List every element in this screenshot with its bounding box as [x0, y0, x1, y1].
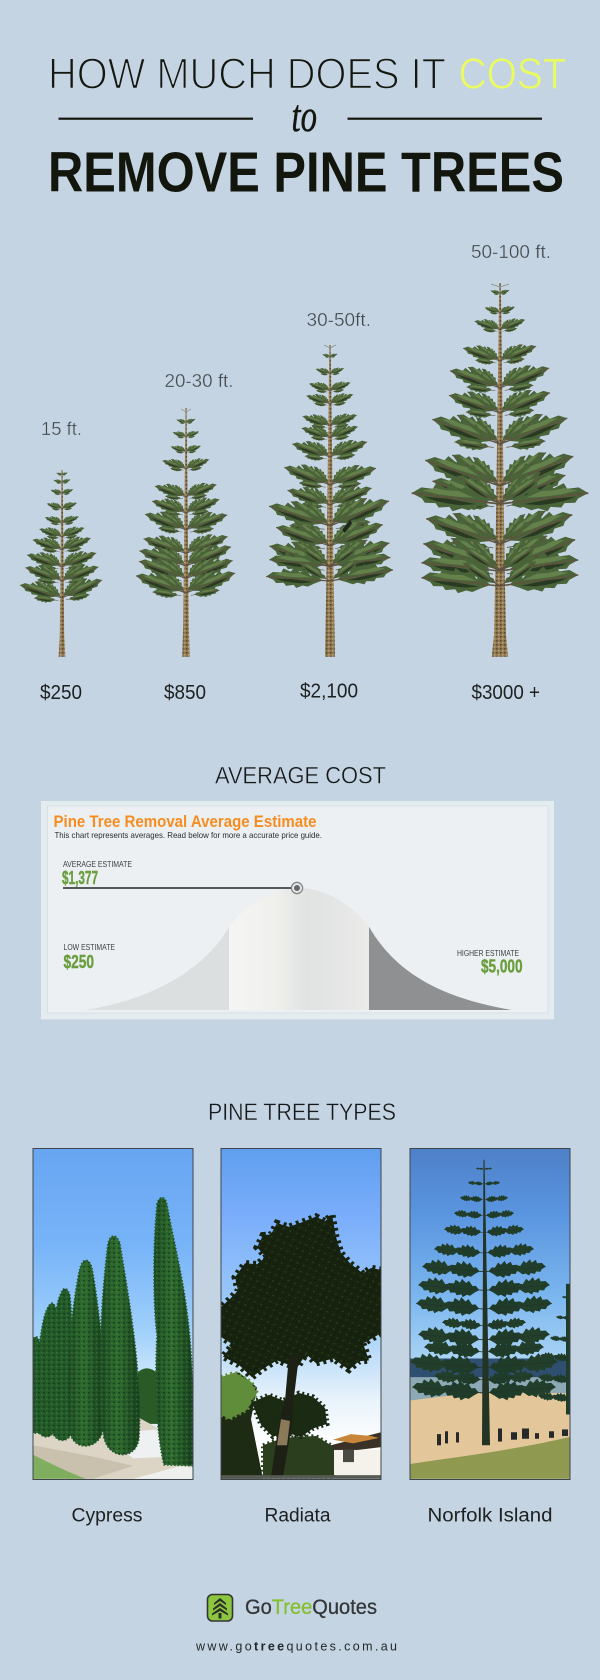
- price: $3000 +: $3000 +: [472, 682, 540, 704]
- heading: average cost: AVERAGE COST: [215, 762, 386, 789]
- heading: pine tree types: PINE TREE TYPES: [208, 1099, 396, 1126]
- title left rule: [58, 118, 253, 120]
- price: $2,100: $2,100: [300, 681, 358, 703]
- chart subtitle: This chart represents averages. Read below for more a accurate price guide.: [54, 830, 322, 840]
- tree label: 20-30 ft: 20-30 ft.: [164, 370, 234, 391]
- title word: to: to: [292, 90, 317, 141]
- low estimate value: $250: [64, 951, 94, 972]
- price: $250: $250: [40, 682, 82, 704]
- tree: 20-30 ft illustration: [133, 408, 238, 657]
- bell curve: [85, 888, 512, 1010]
- tree label: 30-50 ft: 30-50ft.: [306, 309, 371, 330]
- photo: radiata: [221, 1148, 381, 1480]
- tree label: 50-100 ft: 50-100 ft.: [471, 241, 551, 262]
- logo icon: [208, 1594, 232, 1621]
- logo wordmark: GoTreeQuotes: [245, 1596, 377, 1619]
- photo: norfolk island: [410, 1148, 570, 1480]
- average estimate label: AVERAGE ESTIMATE: [63, 860, 132, 869]
- caption: cypress: Cypress: [72, 1504, 143, 1526]
- title line: how much does it: HOW MUCH DOES IT: [48, 50, 446, 98]
- website url: www.gotreequotes.com.au: [195, 1640, 397, 1654]
- average marker line: [63, 882, 303, 894]
- photo: cypress: [33, 1148, 194, 1480]
- chart title: Pine Tree Removal Average Estimate: [54, 813, 316, 831]
- title: [48, 50, 566, 205]
- higher estimate label: HIGHER ESTIMATE: [457, 949, 519, 958]
- tree: 50-100 ft illustration: [409, 283, 591, 657]
- panel: tree heights and prices: [17, 241, 591, 704]
- average estimate value: $1,377: [62, 867, 98, 888]
- tree label: 15 ft: 15 ft.: [41, 418, 82, 439]
- caption: norfolk island: Norfolk Island: [428, 1504, 552, 1526]
- caption: radiata: Radiata: [264, 1504, 331, 1526]
- tree: 30-50 ft illustration: [264, 345, 395, 657]
- price: $850: $850: [164, 682, 206, 704]
- tree: 15 ft illustration: [17, 470, 105, 657]
- title right rule: [348, 118, 542, 120]
- panel: average estimate chart: [41, 801, 554, 1019]
- title word: cost: COST: [458, 50, 566, 98]
- higher estimate value: $5,000: [481, 955, 522, 976]
- low estimate label: LOW ESTIMATE: [64, 943, 115, 952]
